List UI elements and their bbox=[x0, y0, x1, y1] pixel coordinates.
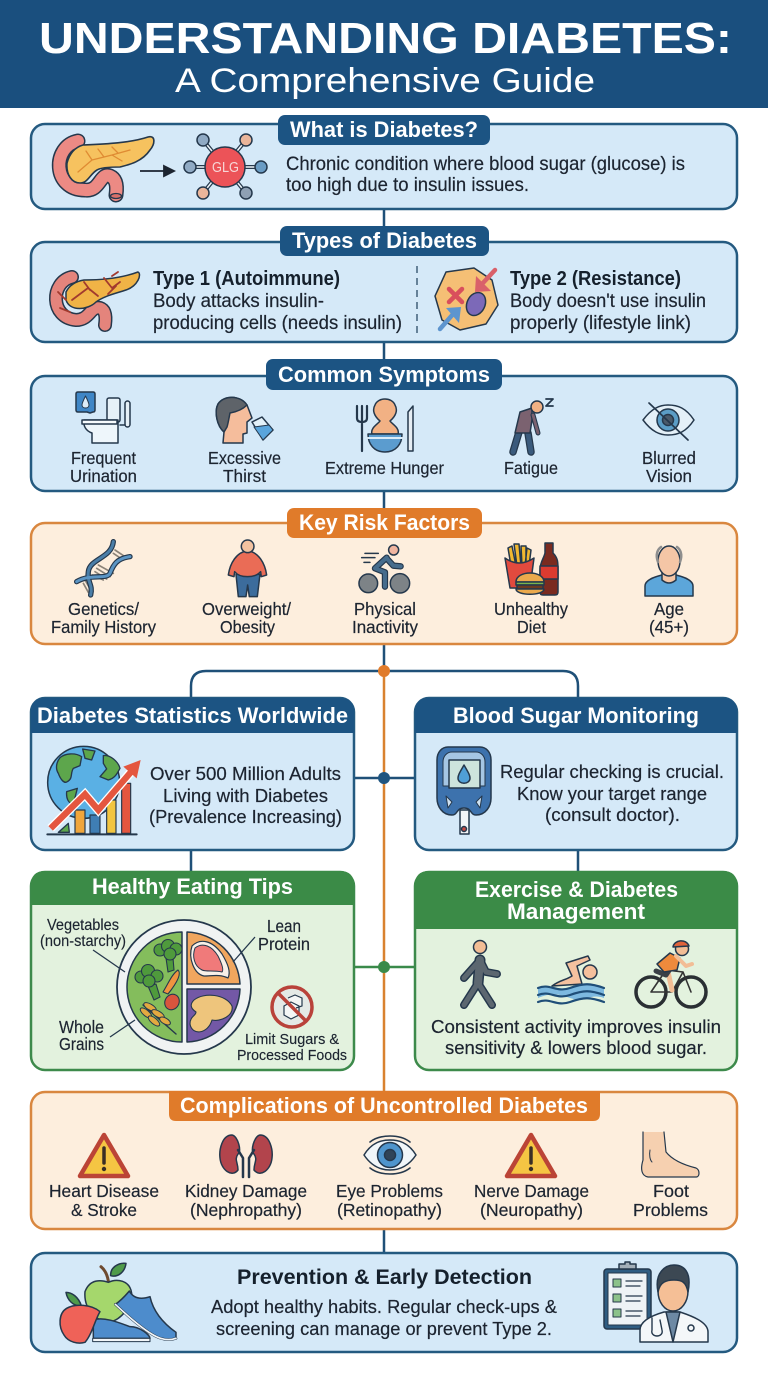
type 1 text bbox=[153, 268, 402, 334]
label bbox=[642, 448, 696, 486]
label: & Stroke bbox=[71, 1200, 137, 1220]
label bbox=[185, 1181, 307, 1220]
type 2 text: Type 2 (Resistance) bbox=[510, 268, 681, 290]
label: (Nephropathy) bbox=[190, 1200, 302, 1220]
monitoring text: Regular checking is crucial. bbox=[500, 761, 724, 782]
heading tab: Complications of Uncontrolled Diabetes bbox=[180, 1093, 588, 1118]
label: Unhealthy bbox=[494, 599, 568, 619]
plate callout lines bbox=[93, 937, 255, 1037]
icon: older person bbox=[645, 546, 693, 596]
icon: arrow bbox=[140, 166, 174, 176]
panel header bbox=[415, 871, 737, 929]
label: Problems bbox=[633, 1200, 708, 1220]
icon: damaged pancreas bbox=[56, 272, 140, 325]
connector node: green bbox=[378, 961, 390, 973]
icon: warning heart bbox=[80, 1135, 128, 1176]
heading tab: Types of Diabetes bbox=[292, 228, 477, 253]
label: Extreme Hunger bbox=[325, 458, 444, 478]
plate labels: (non-starchy) bbox=[40, 933, 126, 950]
grain blobs bbox=[190, 995, 232, 1032]
label bbox=[70, 448, 137, 486]
panel: types of diabetes bbox=[31, 226, 737, 342]
wheat bbox=[139, 1001, 176, 1034]
limit sugars label: Processed Foods bbox=[237, 1047, 347, 1064]
icon: warning nerve bbox=[507, 1135, 555, 1176]
label: Heart Disease bbox=[49, 1181, 159, 1201]
icon: glucose molecule bbox=[184, 134, 267, 199]
icon: glucose meter bbox=[437, 747, 491, 834]
plate labels: Vegetables bbox=[47, 917, 119, 934]
heading tab: Common Symptoms bbox=[278, 362, 490, 387]
exercise text: Consistent activity improves insulin bbox=[431, 1016, 721, 1037]
type 1 text: Body attacks insulin- bbox=[153, 290, 324, 312]
description text: too high due to insulin issues. bbox=[286, 174, 529, 196]
limit sugars label: Limit Sugars & bbox=[245, 1031, 339, 1048]
connector node: blue bbox=[378, 772, 390, 784]
panel header: Blood Sugar Monitoring bbox=[453, 703, 699, 728]
prevention text: screening can manage or prevent Type 2. bbox=[216, 1318, 552, 1339]
panel: statistics bbox=[31, 698, 354, 850]
label: Fatigue bbox=[504, 458, 558, 478]
label: (Neuropathy) bbox=[480, 1200, 583, 1220]
label bbox=[49, 1181, 159, 1220]
label: Blurred bbox=[642, 448, 696, 468]
icon: eye bbox=[364, 1136, 416, 1174]
prevention text: Adopt healthy habits. Regular check-ups & bbox=[211, 1296, 558, 1317]
type 2 text bbox=[510, 268, 706, 334]
icon: foot bbox=[642, 1132, 699, 1177]
header banner bbox=[0, 0, 768, 108]
panel: prevention bbox=[31, 1253, 737, 1352]
icon: blurred eye bbox=[643, 403, 694, 440]
panel: healthy eating bbox=[31, 871, 354, 1070]
panel: complications bbox=[31, 1091, 737, 1229]
panel: exercise bbox=[415, 871, 737, 1070]
label bbox=[51, 599, 156, 637]
label bbox=[633, 1181, 708, 1220]
icon: dna bbox=[77, 542, 130, 595]
statistics text: (Prevalence Increasing) bbox=[149, 806, 342, 827]
connector node: orange bbox=[378, 665, 390, 677]
carrot bbox=[163, 970, 179, 994]
tomato bbox=[162, 992, 182, 1012]
icon: overweight person bbox=[228, 540, 267, 597]
exercise text: sensitivity & lowers blood sugar. bbox=[445, 1037, 707, 1058]
icon: walker bbox=[464, 940, 497, 1005]
label: Excessive bbox=[208, 448, 281, 468]
plate bbox=[117, 920, 251, 1054]
panel header: Diabetes Statistics Worldwide bbox=[37, 703, 348, 728]
label: Eye Problems bbox=[336, 1181, 443, 1201]
icon: globe and rising chart bbox=[47, 746, 141, 834]
icon: junk food bbox=[505, 543, 558, 595]
label: Thirst bbox=[223, 466, 266, 486]
label: (45+) bbox=[649, 617, 689, 637]
icon: pancreas bbox=[59, 137, 154, 198]
description text bbox=[286, 153, 685, 196]
panel: what is diabetes bbox=[31, 115, 737, 209]
icon: road cyclist bbox=[636, 941, 706, 1007]
label: (Retinopathy) bbox=[337, 1200, 442, 1220]
title: UNDERSTANDING DIABETES: bbox=[39, 14, 732, 63]
prevention text bbox=[211, 1296, 558, 1339]
type 2 text: properly (lifestyle link) bbox=[510, 312, 691, 334]
panel header bbox=[415, 698, 737, 733]
label: Family History bbox=[51, 617, 156, 637]
icon: hunger plate person bbox=[357, 399, 413, 452]
label: Nerve Damage bbox=[474, 1181, 589, 1201]
limit sugars label bbox=[237, 1031, 347, 1064]
broccoli bbox=[135, 940, 182, 1000]
statistics text: Over 500 Million Adults bbox=[150, 763, 341, 784]
subtitle: A Comprehensive Guide bbox=[175, 62, 595, 100]
monitoring text: Know your target range bbox=[517, 783, 707, 804]
icon: drinking person bbox=[216, 397, 273, 443]
type 2 text: Body doesn't use insulin bbox=[510, 290, 706, 312]
meat center bbox=[194, 945, 223, 972]
statistics text bbox=[149, 763, 342, 827]
icon: apples and shoes bbox=[60, 1263, 176, 1343]
exercise text bbox=[431, 1016, 721, 1058]
panel: common symptoms bbox=[31, 359, 737, 491]
label: Frequent bbox=[71, 448, 136, 468]
label: Foot bbox=[653, 1181, 689, 1201]
statistics text: Living with Diabetes bbox=[163, 785, 328, 806]
heading: Prevention & Early Detection bbox=[237, 1266, 532, 1289]
icon: no sugar bbox=[272, 987, 312, 1027]
label: Age bbox=[654, 599, 684, 619]
label bbox=[336, 1181, 443, 1220]
panel header bbox=[31, 698, 354, 733]
connector lines bbox=[191, 209, 578, 1253]
monitoring text bbox=[500, 761, 724, 825]
monitoring text: (consult doctor). bbox=[545, 804, 680, 825]
plate labels: Whole bbox=[59, 1017, 104, 1037]
icon: clipboard and doctor bbox=[604, 1262, 708, 1342]
label: Vision bbox=[646, 466, 692, 486]
heading tab: Key Risk Factors bbox=[299, 510, 470, 535]
label: Obesity bbox=[220, 617, 275, 637]
type 1 text: producing cells (needs insulin) bbox=[153, 312, 402, 334]
icon: kidneys bbox=[220, 1135, 272, 1177]
icon: cyclist bbox=[359, 545, 410, 593]
plate labels bbox=[40, 916, 310, 1054]
label: Diet bbox=[517, 617, 546, 637]
panel header: Exercise & Diabetes bbox=[475, 877, 678, 902]
label bbox=[202, 599, 291, 637]
panel: key risk factors bbox=[31, 508, 737, 644]
meat bbox=[191, 941, 229, 978]
label: Inactivity bbox=[352, 617, 418, 637]
label: Genetics/ bbox=[68, 599, 139, 619]
panel: blood sugar monitoring bbox=[415, 698, 737, 850]
plate labels: Grains bbox=[59, 1034, 104, 1054]
plate labels: Protein bbox=[258, 934, 310, 954]
panel header: Healthy Eating Tips bbox=[92, 874, 293, 899]
panel header bbox=[31, 871, 354, 905]
label bbox=[208, 448, 281, 486]
icon: glucose molecule: GLG bbox=[212, 159, 239, 176]
icon: resistant cell bbox=[435, 268, 498, 330]
label: Overweight/ bbox=[202, 599, 291, 619]
label: Physical bbox=[354, 599, 416, 619]
type 1 text: Type 1 (Autoimmune) bbox=[153, 268, 340, 290]
label bbox=[474, 1181, 589, 1220]
label bbox=[649, 599, 689, 637]
label: Urination bbox=[70, 466, 137, 486]
panel header: Management bbox=[507, 899, 646, 924]
label: Kidney Damage bbox=[185, 1181, 307, 1201]
description text: Chronic condition where blood sugar (glucose) is bbox=[286, 153, 685, 175]
icon: fatigued person bbox=[513, 399, 553, 452]
icon: toilet bbox=[76, 392, 130, 443]
icon: swimmer bbox=[538, 956, 604, 1003]
label bbox=[494, 599, 568, 637]
label bbox=[352, 599, 418, 637]
plate labels: Lean bbox=[267, 916, 301, 936]
heading tab: What is Diabetes? bbox=[290, 117, 478, 142]
